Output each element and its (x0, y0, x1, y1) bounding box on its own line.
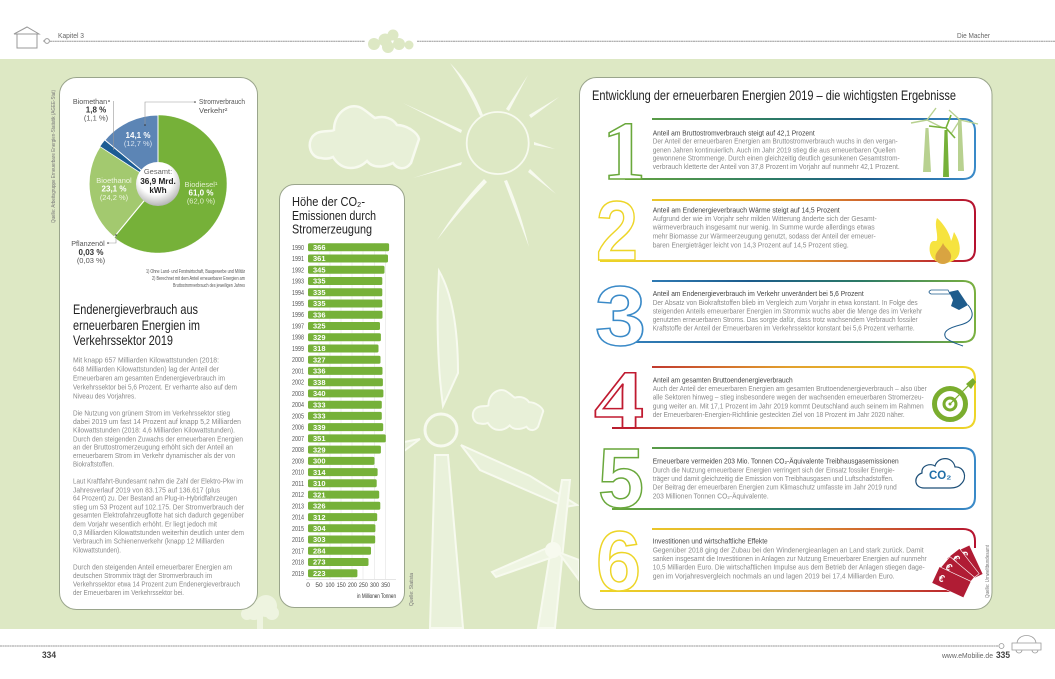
text block: body: Erneuerbaren am gesamten Endenergieverbrauch im (73, 374, 225, 383)
text: result 4 (653, 375, 927, 419)
footnotes (146, 269, 245, 289)
text block: body: Jahresverlauf 2019 von 83.175 auf 136.617 (plus (73, 485, 220, 494)
text block: body: Verkehrssektor etwa 14 Prozent zum Endenergieverbrauch (73, 579, 240, 588)
icon: target (934, 378, 976, 420)
icon: CO2 cloud: CO₂ (929, 470, 951, 482)
text: result 6: Investitionen und wirtschaftliche Effekte (653, 537, 768, 546)
heading: Die Macher: Die Macher (957, 31, 990, 40)
text block: body: stieg um 53 Prozent auf 102.175. Der Stromverbrauch der (73, 502, 245, 511)
pie chart (89, 115, 227, 253)
label: Bioethanol: 23,1 % (102, 184, 126, 194)
bar chart: values: 336 (313, 367, 326, 376)
label: Biomethan: Biomethan (73, 97, 107, 106)
text: result 3: genutzten erneuerbaren Stroms. Das sorgte dafür, dass trotz wachsendem Verbrauch fossiler (653, 315, 918, 324)
text: result 5: 203 Millionen Tonnen CO₂-Äquivalente. (653, 491, 769, 500)
label: Stromverbrauch Verkehr (199, 97, 245, 115)
heading: Endenergieverbrauch: Verkehrssektor 2019 (73, 332, 173, 348)
label: center total (136, 162, 180, 206)
label: Biodiesel: (62,0 %) (187, 196, 216, 206)
numeral 1: 1 (602, 105, 646, 198)
text block: body: Durch den steigenden Anteil erneuerbarer Energien am (73, 562, 232, 571)
bar chart: years: 1993 (292, 278, 304, 286)
text block: body: Kilowattstunden (2018: 4,6 Milliarden Kilowattstunden). (73, 425, 235, 434)
header: chapter (14, 27, 990, 48)
illustration: wind turbine large (404, 271, 577, 628)
bar chart: values: 333 (313, 412, 326, 421)
heading: CO2 emissions: Stromerzeugung (292, 222, 372, 236)
source: pie chart: Quelle: Arbeitsgruppe Erneuerbare Energien-Statistik (AGEE-Stat) (51, 90, 57, 223)
label: Bioethanol: (24,2 %) (100, 193, 129, 202)
icon: euro banknotes: € (950, 553, 962, 565)
illustration: wind turbine small (492, 480, 579, 628)
text block: body: Verkehrssektor bei 5,6 Prozent. Er verharrte also auf dem (73, 382, 237, 391)
text: result 2: Anteil am Endenergieverbrauch Wärme steigt auf 14,5 Prozent (653, 205, 840, 214)
bar chart: values: 304 (313, 524, 326, 533)
text: result 1 (653, 128, 900, 171)
bar chart: values: 318 (313, 344, 326, 353)
text: result 2: Aufgrund der wie im Vorjahr sehr milden Witterung änderte sich der Gesamt- (653, 214, 877, 223)
numeral 2: 2 (596, 184, 638, 278)
text: result 2: mehr Biomasse zur Wärmeerzeugung genutzt, sodass der Anteil der erneuer- (653, 231, 876, 240)
icon: header cloud (368, 30, 414, 53)
heading: CO2 emissions: Emissionen durch (292, 209, 376, 223)
label: Stromverbrauch Verkehr: Verkehr² (199, 106, 228, 115)
text: result 3 (653, 289, 923, 333)
label: Biodiesel: Biodiesel¹ (185, 180, 218, 189)
bar chart: years (292, 245, 304, 578)
text: result 5: Der Beitrag der erneuerbaren Energien zum Klimaschutz umfasste im Jahr 2019 rund (653, 483, 897, 492)
text block: body (73, 356, 245, 597)
bar chart: years: 2006 (292, 425, 304, 432)
bar chart: values: 273 (313, 558, 326, 567)
bar chart: values: 303 (313, 535, 326, 544)
text: result 1: verbrauch kletterte der Anteil von 37,8 Prozent im Vorjahr auf nunmehr 42,1 Prozent. (653, 162, 900, 171)
label: Bioethanol (96, 176, 132, 202)
label: Pflanzenöl: Pflanzenöl (71, 239, 105, 248)
bar chart: values: 223 (313, 569, 326, 578)
text block: body: der Erneuerbaren im Verkehrssektor bei. (73, 588, 184, 597)
icon: euro banknotes: € (957, 550, 970, 560)
icon: euro banknotes (932, 545, 983, 598)
illustration: cloud upper (310, 106, 419, 168)
label: Bioethanol: Bioethanol (96, 176, 132, 185)
illustration: tree (241, 595, 279, 629)
bar chart: years: 2007 (292, 436, 304, 443)
bar chart: values: 333 (313, 400, 326, 409)
text block: body: Mit knapp 657 Milliarden Kilowattstunden (2018: (73, 356, 219, 365)
label: Strom share (124, 131, 153, 148)
bar chart: years: 1999 (292, 346, 304, 353)
text block: body: gesamten Elektrofahrzeugflotte hat sich dadurch gegenüber (73, 511, 244, 520)
bar chart: values: 314 (313, 468, 326, 477)
text block: body: dem Vorjahr wesentlich erhöht. Er liegt jedoch mit (73, 519, 217, 528)
icon: fuel pump nozzle (929, 290, 972, 346)
icon: wind turbines (911, 108, 978, 177)
label: Biomethan: 1,8 % (86, 106, 106, 114)
bar chart: years: 2008 (292, 447, 304, 454)
bar chart: values: 300 (313, 457, 326, 466)
text: result 2: wärmeverbrauch insgesamt nur wenig. In Summe wurde allerdings etwas (652, 222, 875, 231)
bar chart: values: 335 (313, 288, 326, 297)
result 2 (596, 184, 975, 278)
icon: euro banknotes: € (936, 573, 947, 585)
heading: Endenergieverbrauch: erneuerbaren Energien im (73, 317, 200, 333)
text: result 2 (652, 205, 877, 249)
bar chart: values (313, 243, 326, 578)
text: result 4: gung weiter an. Mit 17,1 Prozent im Jahr 2019 kommt Deutschland auch seinem im Rahmen (653, 401, 924, 410)
footnotes: Bruttostromverbrauch des jeweiligen Jahres (173, 283, 245, 289)
bar chart: values: 321 (313, 490, 326, 499)
bar chart: years: 2013 (292, 503, 304, 510)
bar chart: values: 351 (313, 434, 326, 443)
text: result 2: baren Energieträger leicht von 14,3 Prozent auf 14,5 Prozent stieg. (653, 240, 849, 249)
text block: body: Verbrauch im Schienenverkehr (knapp 12 Milliarden (73, 537, 224, 546)
icon: house (14, 27, 39, 48)
bar chart: unit: in Millionen Tonnen (357, 593, 396, 600)
text block: body: Kilowattstunden). (73, 545, 121, 554)
bar chart: values: 325 (313, 322, 326, 331)
bar chart: years: 2011 (292, 481, 304, 488)
bar chart: values: 339 (313, 423, 326, 432)
icon: flame (930, 218, 960, 264)
bar chart: x axis: 50 (315, 582, 323, 589)
source: CO2 chart: Quelle: Statista (409, 572, 415, 606)
text: result 4: alle Sektoren hinweg – stieg insbesondere wegen der wachsenden erneuerbaren Stromerzeu- (653, 393, 924, 402)
heading: CO2 emissions (292, 195, 376, 236)
text block: body: Durch den steigenden Zuwachs der erneuerbaren Energien (73, 434, 243, 443)
result 1 (602, 105, 978, 198)
bar chart: years: 1998 (292, 335, 304, 342)
bar chart: values: 340 (313, 389, 326, 398)
bar chart: x axis: 150 (337, 582, 346, 589)
illustration: cloud lower (473, 390, 543, 430)
label: Biodiesel (185, 180, 218, 206)
bar chart: years: 2016 (292, 537, 304, 544)
text: result 5: Durch die Nutzung erneuerbarer Energien verringert sich der Einsatz fossiler Energie- (653, 465, 895, 474)
icon: plug (43, 39, 49, 43)
bar chart: years: 2000 (292, 357, 304, 364)
text: result 6: gen im Vorjahresvergleich nochmals an und lagen 2019 bei 17,4 Milliarden Euro. (653, 571, 895, 580)
label: Pflanzenöl: 0,03 % (79, 248, 103, 257)
panel: biofuel pie and text (60, 78, 258, 610)
bar chart: values: 335 (313, 299, 326, 308)
bar chart: values: 326 (313, 502, 326, 510)
numeral 3: 3 (595, 269, 646, 363)
bar chart: x axis: 200 (348, 582, 357, 589)
text block: body: deutschen Strommix trägt der Stromverbrauch im (73, 571, 212, 580)
text: result 4: Anteil am gesamten Bruttoendenergieverbrauch (653, 375, 793, 384)
illustration: sun (403, 63, 559, 247)
bar chart: x axis: 0 (306, 582, 310, 589)
label: center total: kWh (149, 186, 167, 195)
bar chart: values: 284 (313, 546, 326, 556)
leader lines (107, 100, 196, 244)
bar chart: years: 2017 (292, 548, 304, 555)
bar chart: years: 2018 (292, 560, 304, 566)
text block: body: Die Nutzung von grünem Strom im Verkehrssektor stieg (73, 409, 230, 418)
text: result 3: Kraftstoffe der Anteil der Erneuerbaren im Verkehrssektor konstant bei 5,6 Prozent verharrte. (653, 324, 915, 333)
result 4 (594, 354, 976, 447)
text block: body: erneuerbarem Strom im Verkehr dynamischer als der von (73, 451, 235, 460)
page number right: 335 (996, 650, 1010, 660)
heading: Endenergieverbrauch (73, 301, 200, 348)
result 6 (596, 514, 983, 608)
text block: body: Niveau des Vorjahres. (73, 391, 136, 400)
text: result 1: genen Jahren kontinuierlich. Auch im Jahr 2019 stieg die aus erneuerbaren Quellen (653, 145, 896, 154)
text: result 1: Anteil am Bruttostromverbrauch steigt auf 42,1 Prozent (653, 128, 815, 138)
heading: CO2 emissions: Höhe der CO₂- (292, 195, 365, 209)
label: Pflanzenöl (71, 239, 106, 265)
label: Pflanzenöl: (0,03 %) (77, 256, 106, 265)
heading: results title: Entwicklung der erneuerbaren Energien 2019 – die wichtigsten Ergebnisse (592, 87, 956, 103)
bar chart: years: 2019 (292, 571, 304, 578)
bar chart: years: 1991 (292, 256, 304, 263)
label: center total: 36,9 Mrd. (140, 177, 176, 186)
text: result 1: gewonnene Strommenge. Durch einen gleichzeitig deutlich gesunkenen Gesamtstrom- (653, 154, 900, 163)
icon: CO2 cloud (916, 459, 965, 488)
text: result 3: Anteil am Endenergieverbrauch im Verkehr unverändert bei 5,6 Prozent (653, 289, 864, 298)
bar chart: values: 361 (313, 254, 326, 263)
bar chart: x axis: 250 (359, 582, 368, 589)
icon: euro banknotes: € (943, 562, 954, 574)
numeral 4: 4 (594, 354, 644, 447)
text: result 6 (653, 537, 927, 580)
bar chart: values: 329 (313, 445, 326, 454)
bar chart: values: 329 (313, 333, 326, 342)
bar chart: years: 2015 (292, 526, 304, 533)
bar chart: years: 1990 (292, 245, 304, 252)
result 3 (595, 269, 975, 363)
label: Strom share: 14,1 % (126, 131, 150, 140)
bar chart: values: 345 (313, 266, 326, 274)
text block: body: an der Bruttostromerzeugung erhöht sich der Anteil an (73, 442, 233, 451)
page number left: 334 (42, 650, 56, 660)
text: result 5: träger und damit gleichzeitig die Emission von Treibhausgasen und Luftschadstoffen. (653, 474, 894, 483)
bar chart: values: 338 (313, 378, 326, 387)
text: result 3: Der Absatz von Biokraftstoffen blieb im Vergleich zum Vorjahr in etwa konstant. In Folge des (653, 298, 918, 307)
footnotes: 2) Berechnet mit dem Anteil erneuerbarer Energien am (152, 276, 245, 282)
heading: Endenergieverbrauch: Endenergieverbrauch aus (73, 301, 198, 317)
bar chart: years: 1992 (292, 267, 304, 274)
label: Biomethan (73, 97, 109, 122)
heading: Kapitel 3: Kapitel 3 (58, 31, 84, 40)
text block: body: 0,3 Milliarden Kilowattstunden weiterhin deutlich unter dem (73, 528, 244, 537)
result 5 (598, 431, 975, 525)
bar chart: years: 2009 (292, 458, 304, 465)
icon: car (999, 636, 1041, 653)
bar chart: years: 1995 (292, 301, 304, 308)
bar chart: years: 2005 (292, 413, 304, 420)
bar chart: values: 366 (313, 243, 326, 252)
label: Biomethan: (1,1 %) (84, 114, 109, 122)
text block: body: Biokraftstoffen. (73, 459, 114, 468)
bar chart: years: 2001 (292, 368, 304, 375)
bar chart: values: 336 (313, 310, 326, 319)
bar chart: years: 2004 (292, 402, 304, 409)
bar chart: values: 310 (313, 479, 326, 488)
text block: body: dabei 2019 um fast 14 Prozent auf knapp 5,2 Milliarden (73, 417, 241, 426)
bar chart: x axis: 300 (370, 582, 379, 589)
website: www.eMobilie.de (941, 651, 993, 660)
text block: body: Laut Kraftfahrt-Bundesamt nahm die Zahl der Elektro-Pkw im (73, 477, 243, 486)
bar chart: years: 2014 (292, 515, 304, 522)
bar chart: years: 2003 (292, 391, 304, 398)
numeral 6: 6 (596, 514, 641, 608)
bar chart: x axis: 100 (326, 582, 335, 589)
label: Biodiesel: 61,0 % (189, 188, 213, 198)
text: result 5: Erneuerbare vermeiden 203 Mio. Tonnen CO₂-Äquivalente Treibhausgasemissionen (653, 457, 899, 466)
bar chart: years: 2010 (292, 470, 304, 477)
text: result 4: Auch der Anteil der erneuerbaren Energien am gesamten Bruttoendenergieverbrauch – also über (653, 384, 927, 393)
label: Strom share: (12,7 %) (124, 139, 153, 148)
bar chart: years: 2002 (292, 380, 304, 387)
text: result 5 (653, 457, 899, 500)
bar chart: values: 335 (313, 277, 326, 286)
bar chart: bars (308, 243, 389, 577)
bar chart: values: 312 (313, 513, 326, 522)
text: result 6: sanken insgesamt die Investitionen in Anlagen zur Nutzung Erneuerbarer Energien auf nunmehr (653, 554, 927, 563)
label: Stromverbrauch Verkehr: Stromverbrauch (199, 97, 245, 106)
bar chart: years: 2012 (292, 492, 304, 499)
footer (0, 636, 1041, 660)
text block: body: 64 Prozent) zu. Der Bestand an Plug-in-Hybridfahrzeugen (73, 494, 237, 503)
label: center total: Gesamt: (144, 167, 172, 176)
bar chart: values: 327 (313, 355, 326, 364)
text: result 6: Gegenüber 2018 ging der Zubau bei den Windenergieanlagen an Land stark zurück. Damit (653, 546, 924, 555)
text: result 6: 10,5 Milliarden Euro. Die wirtschaftlichen Impulse aus dem Betrieb der Anlagen stiegen dage- (653, 563, 925, 572)
bar chart: years: 1994 (292, 290, 304, 297)
bar chart: years: 1996 (292, 312, 304, 319)
bar chart: x axis: 350 (381, 582, 390, 589)
bar chart: years: 1997 (292, 324, 304, 330)
text block: body: 648 Milliarden Kilowattstunden) lag der Anteil der (73, 365, 220, 374)
numeral 5: 5 (598, 431, 644, 525)
panel: CO2 emissions chart (280, 184, 404, 608)
text: result 1: Der Anteil der erneuerbaren Energien am Bruttostromverbrauch wuchs in den vergan- (653, 137, 898, 146)
text: result 4: der Erneuerbaren-Energien-Richtlinie gesteckten Ziel von 18 Prozent im Jahr 2020 näher. (653, 410, 905, 419)
text: result 3: steigenden Anteils erneuerbarer Energien im Strommix wuchs aber die Menge des im Verkehr (653, 307, 923, 316)
bar chart: x axis (306, 580, 396, 589)
source: results: Quelle: Umweltbundesamt (985, 545, 991, 598)
footnotes: 1) Ohne Land- und Forstwirtschaft, Baugewerbe und Militär (146, 269, 245, 275)
